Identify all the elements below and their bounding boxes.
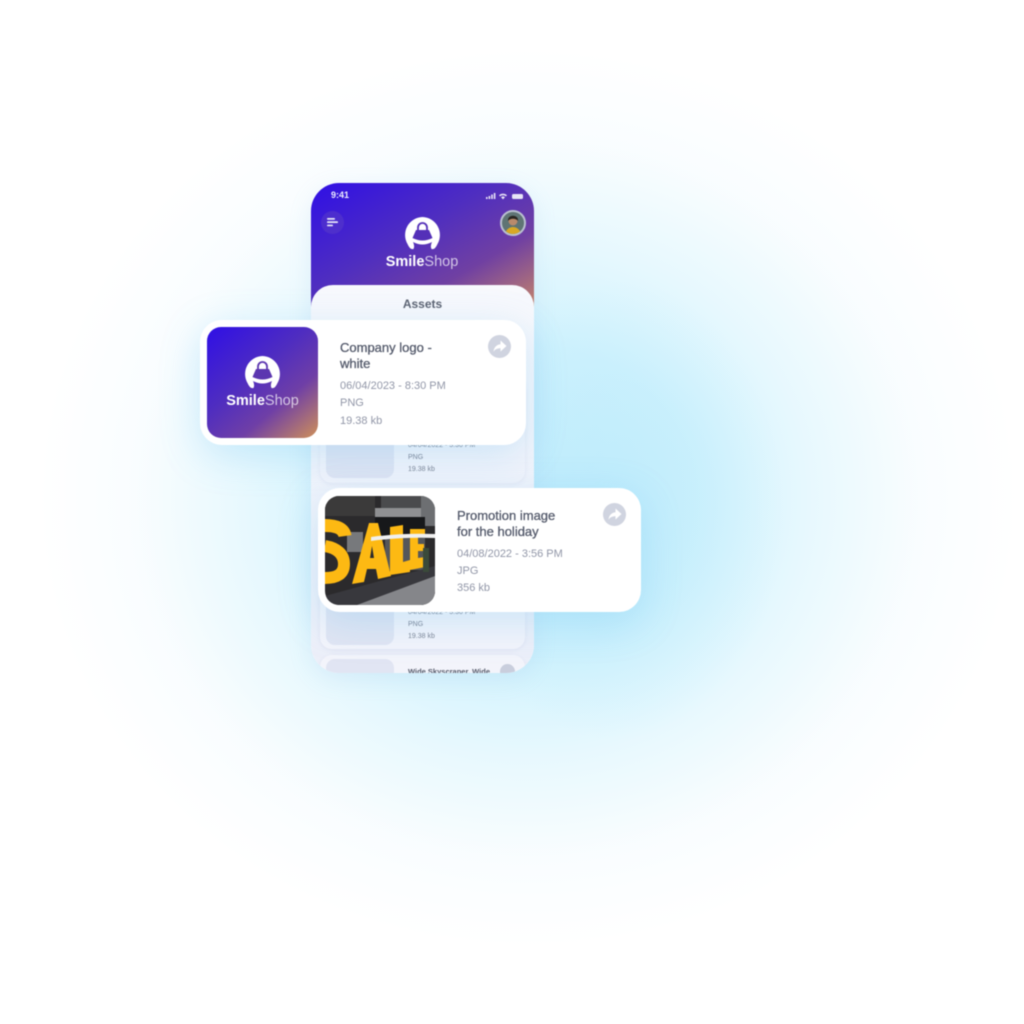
item details: PNG — [408, 454, 423, 461]
item thumbnail — [326, 412, 394, 478]
card: company logo — [200, 320, 526, 445]
card date: 04/08/2022 - 3:56 PM — [457, 548, 563, 560]
item thumbnail — [326, 577, 394, 645]
logo wordmark: SmileShop — [226, 393, 299, 409]
card format: PNG — [340, 397, 364, 409]
card size: 19.38 kb — [340, 415, 382, 427]
item details: 04/04/2022 - 5:30 PM — [408, 609, 475, 616]
SALE letters — [352, 523, 425, 584]
item thumbnail — [326, 659, 394, 709]
item details — [408, 609, 476, 640]
card title — [339, 340, 432, 371]
logo icon — [404, 216, 441, 250]
card size: 356 kb — [457, 582, 490, 594]
status bar time: 9:41 — [331, 190, 349, 200]
phone header — [311, 183, 534, 308]
share icon — [488, 334, 512, 358]
share icon — [602, 502, 626, 526]
status bar icons — [485, 192, 524, 200]
logo icon — [244, 355, 281, 389]
list item behind second card — [320, 543, 525, 649]
item details: 19.38 kb — [408, 633, 435, 640]
card title: Company logo - — [340, 340, 432, 355]
SmileShop logo — [386, 216, 458, 270]
phone mockup — [311, 183, 534, 673]
item share icon — [500, 664, 515, 679]
item details — [408, 442, 476, 473]
partial list item at bottom — [320, 655, 525, 715]
logo thumbnail — [207, 327, 318, 438]
card title: white — [340, 356, 370, 371]
sale photo thumbnail — [324, 495, 436, 606]
item details: 19.38 kb — [408, 466, 435, 473]
assets sheet — [311, 285, 534, 673]
list item behind first card — [320, 377, 525, 483]
card: promotion image — [318, 488, 641, 612]
item details: 04/04/2022 - 5:30 PM — [408, 442, 475, 449]
card title: for the holiday — [457, 524, 539, 539]
card title — [456, 508, 556, 540]
avatar — [500, 210, 526, 236]
item details: PNG — [408, 621, 423, 628]
logo wordmark: SmileShop — [386, 254, 458, 270]
card date: 06/04/2023 - 8:30 PM — [340, 380, 446, 392]
menu button — [321, 211, 344, 234]
sheet title: Assets — [403, 297, 442, 311]
card format: JPG — [457, 565, 478, 577]
card title: Promotion image — [457, 508, 555, 523]
